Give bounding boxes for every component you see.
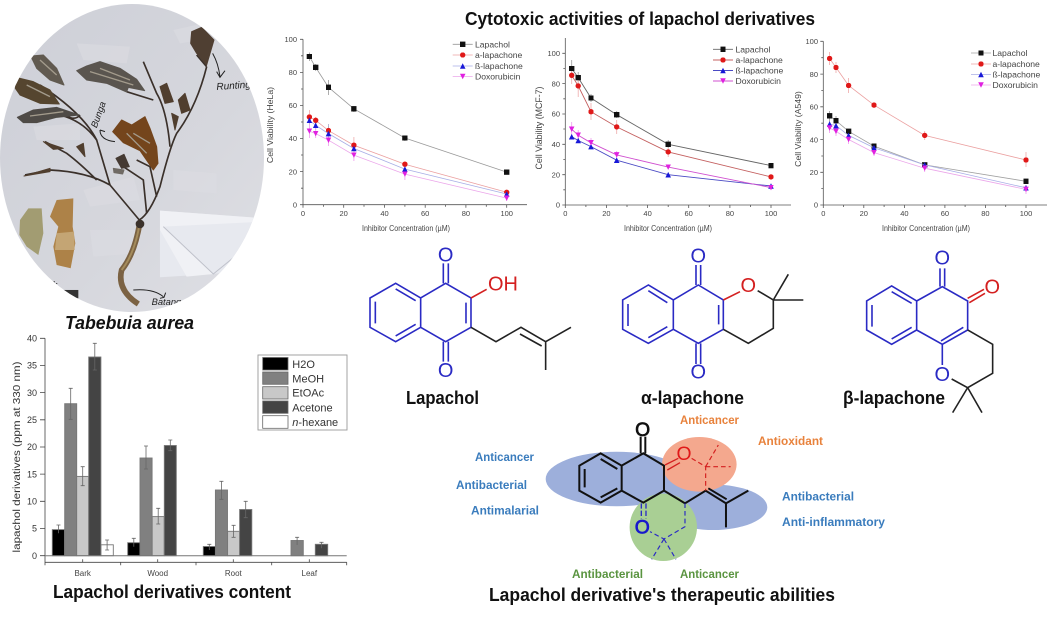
chart: A549 cell viability: 20 — [810, 168, 818, 177]
photo: Tabebuia aurea specimen: Batang — [152, 297, 182, 307]
structure: beta-lapachone — [867, 248, 1000, 413]
structure: lapachol: O — [438, 360, 453, 382]
chart: A549 cell viability: 60 — [941, 209, 949, 218]
caption: Lapachol derivatives content: Lapachol derivatives content — [53, 581, 291, 602]
chart: MCF-7 cell viability: 60 — [552, 110, 560, 119]
bar chart: lapachol derivatives content: Wood — [147, 569, 168, 578]
chart: MCF-7 cell viability: 100 — [547, 49, 560, 58]
chart: A549 cell viability: a-lapachone — [992, 59, 1040, 69]
structure: alpha-lapachone: O — [741, 275, 756, 297]
chart: HeLa cell viability: Lapachol — [475, 39, 510, 49]
title: Cytotoxic activities of lapachol derivatives — [465, 8, 815, 29]
chart: HeLa cell viability: a-lapachone — [475, 50, 523, 60]
chart: A549 cell viability: 80 — [810, 70, 818, 79]
chart: HeLa cell viability: ß-lapachone — [475, 61, 523, 71]
structure: beta-lapachone: O — [985, 277, 1000, 299]
structure: beta-lapachone: O — [935, 364, 950, 386]
structure: lapachol — [370, 245, 571, 382]
chart: HeLa cell viability: 0 — [293, 200, 297, 209]
photo: Tabebuia aurea specimen — [0, 2, 266, 314]
diagram: therapeutic abilities: Antibacterial — [572, 567, 643, 581]
chart: MCF-7 cell viability: Inhibitor Concentration (µM) — [624, 224, 712, 233]
chart: HeLa cell viability: 60 — [421, 209, 429, 218]
chart: MCF-7 cell viability: Cell Viability (MCF-7) — [534, 86, 544, 169]
chart: MCF-7 cell viability: 60 — [685, 209, 693, 218]
bar chart: lapachol derivatives content: 5 — [32, 524, 37, 534]
structure: beta-lapachone: O — [935, 248, 950, 270]
chart: A549 cell viability: Inhibitor Concentration (µM) — [882, 224, 970, 233]
label: alpha-lapachone: α-lapachone — [641, 387, 744, 408]
chart: MCF-7 cell viability: 0 — [556, 201, 560, 210]
chart: HeLa cell viability: Inhibitor Concentration (µM) — [362, 224, 450, 233]
chart: MCF-7 cell viability: 40 — [643, 209, 652, 218]
structure: alpha-lapachone: O — [691, 362, 706, 384]
chart: HeLa cell viability — [265, 35, 527, 233]
chart: HeLa cell viability: 20 — [340, 209, 348, 218]
bar chart: lapachol derivatives content: 35 — [27, 361, 37, 371]
bar chart: lapachol derivatives content: 25 — [27, 415, 37, 425]
caption: therapeutic abilities: Lapachol derivative's therapeutic abilities — [489, 584, 835, 605]
legend: extraction solvents: MeOH — [292, 373, 324, 385]
chart: HeLa cell viability: 80 — [462, 209, 470, 218]
diagram: therapeutic abilities: Anticancer — [680, 567, 739, 581]
chart: A549 cell viability: 80 — [981, 209, 990, 218]
bar chart: lapachol derivatives content: Leaf — [302, 569, 318, 578]
diagram: therapeutic abilities: Antibacterial — [782, 490, 854, 504]
bar chart: lapachol derivatives content: 20 — [27, 442, 37, 452]
chart: HeLa cell viability: 100 — [500, 209, 513, 218]
diagram: therapeutic abilities: Antimalarial — [471, 504, 539, 518]
label: Lapachol: Lapachol — [406, 387, 479, 408]
bar chart: lapachol derivatives content: 30 — [27, 388, 37, 398]
bar chart: lapachol derivatives content: Root — [225, 569, 243, 578]
chart: A549 cell viability: ß-lapachone — [992, 70, 1040, 80]
chart: A549 cell viability: 60 — [810, 102, 818, 112]
chart: A549 cell viability: Cell Viability (A549) — [793, 91, 803, 167]
chart: A549 cell viability: 20 — [860, 209, 868, 218]
chart: A549 cell viability: 0 — [821, 209, 825, 218]
chart: A549 cell viability — [793, 37, 1047, 233]
legend: extraction solvents: n-hexane — [292, 417, 338, 429]
chart: A549 cell viability: 40 — [810, 135, 818, 144]
chart: MCF-7 cell viability — [534, 38, 791, 233]
label: beta-lapachone: β-lapachone — [843, 387, 945, 408]
chart: A549 cell viability: 0 — [814, 201, 818, 210]
chart: MCF-7 cell viability: 40 — [552, 140, 560, 149]
chart: HeLa cell viability: 0 — [301, 209, 305, 218]
chart: MCF-7 cell viability: Lapachol — [736, 44, 770, 54]
bar chart: lapachol derivatives content: 40 — [27, 334, 37, 344]
structure: alpha-lapachone: O — [691, 246, 706, 268]
bar chart: lapachol derivatives content: lapachol derivatives (ppm at 330 nm) — [12, 362, 23, 552]
diagram: therapeutic abilities: Antioxidant — [758, 434, 823, 448]
photo: Tabebuia aurea specimen: Bunga — [89, 100, 108, 129]
diagram: therapeutic abilities: Anti-inflammatory — [782, 515, 885, 529]
diagram: therapeutic abilities: Antibacterial — [456, 478, 527, 492]
photo: Tabebuia aurea specimen: ik — [50, 280, 58, 291]
chart: HeLa cell viability: 100 — [284, 35, 297, 44]
diagram: therapeutic abilities: Anticancer — [680, 413, 739, 427]
chart: A549 cell viability: 100 — [805, 37, 818, 46]
chart: MCF-7 cell viability: Doxorubicin — [736, 76, 781, 86]
diagram: therapeutic abilities: O — [635, 517, 650, 538]
bar chart: lapachol derivatives content: 0 — [32, 551, 37, 561]
chart: HeLa cell viability: 80 — [289, 68, 297, 77]
chart: A549 cell viability: 40 — [900, 209, 909, 218]
chart: MCF-7 cell viability: 20 — [552, 170, 560, 179]
chart: HeLa cell viability: Doxorubicin — [475, 72, 521, 82]
chart: A549 cell viability: Doxorubicin — [992, 80, 1038, 90]
chart: HeLa cell viability: 60 — [289, 101, 297, 110]
chart: MCF-7 cell viability: 20 — [602, 209, 611, 218]
chart: A549 cell viability: 100 — [1020, 209, 1032, 218]
chart: HeLa cell viability: 40 — [289, 134, 297, 143]
diagram: therapeutic abilities: O — [635, 420, 650, 441]
chart: HeLa cell viability: 40 — [380, 209, 389, 218]
diagram: therapeutic abilities — [456, 413, 885, 581]
legend: extraction solvents: H2O — [292, 359, 315, 371]
diagram: therapeutic abilities: Anticancer — [475, 450, 534, 464]
chart: MCF-7 cell viability: ß-lapachone — [736, 66, 783, 76]
structure: alpha-lapachone — [623, 246, 803, 384]
structure: lapachol: O — [438, 245, 453, 267]
chart: MCF-7 cell viability: 0 — [563, 209, 567, 218]
legend: extraction solvents: Acetone — [292, 402, 333, 414]
chart: MCF-7 cell viability: 80 — [726, 209, 734, 218]
chart: HeLa cell viability: Cell Viability (HeLa) — [265, 87, 275, 163]
bar chart: lapachol derivatives content — [12, 334, 347, 578]
legend: extraction solvents — [258, 355, 347, 430]
chart: A549 cell viability: Lapachol — [992, 48, 1027, 58]
bar chart: lapachol derivatives content: Bark — [74, 569, 92, 578]
diagram: therapeutic abilities: O — [676, 444, 692, 465]
structure: lapachol: OH — [488, 274, 518, 296]
caption: Tabebuia aurea: Tabebuia aurea — [65, 312, 194, 333]
bar chart: lapachol derivatives content: 15 — [27, 469, 37, 479]
legend: extraction solvents: EtOAc — [292, 388, 325, 400]
bar chart: lapachol derivatives content: 10 — [27, 496, 37, 506]
chart: MCF-7 cell viability: a-lapachone — [736, 55, 783, 65]
chart: MCF-7 cell viability: 100 — [765, 209, 777, 218]
photo: Tabebuia aurea specimen: Runting — [216, 80, 252, 93]
chart: HeLa cell viability: 20 — [289, 167, 297, 176]
chart: MCF-7 cell viability: 80 — [552, 79, 560, 88]
